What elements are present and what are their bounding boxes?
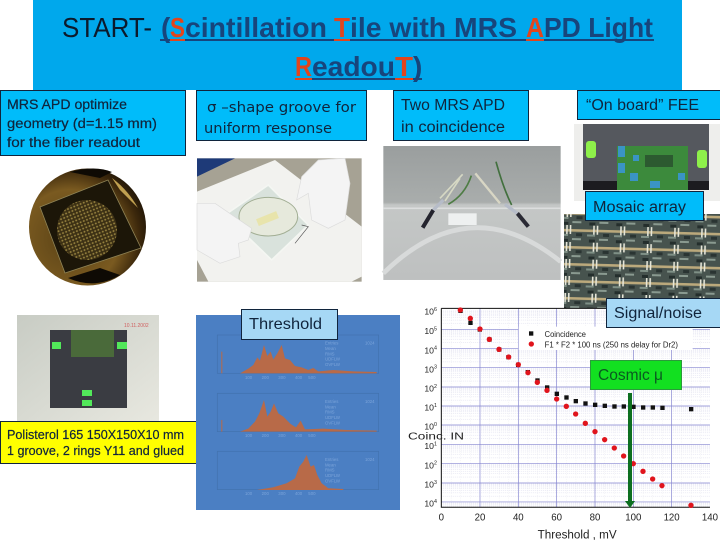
chart: threshold histograms: 500 <box>308 433 316 438</box>
photo: tile with electronics <box>17 315 159 423</box>
chart: threshold histograms: 500 <box>308 491 316 496</box>
title banner: PD Light <box>544 12 653 43</box>
caption: signal/noise <box>606 298 720 328</box>
photo: gloved hands holding tile <box>197 158 362 282</box>
chart: threshold histograms: Entries <box>325 341 338 346</box>
chart: threshold histograms: 300 <box>278 491 286 496</box>
chart: coincidence rate versus threshold: 140 <box>702 513 718 524</box>
series: accidental rate <box>458 307 694 508</box>
chart: threshold histograms: Mean <box>325 346 336 351</box>
caption: mosaic array: Mosaic array <box>593 199 686 216</box>
chart: coincidence rate versus threshold: 60 <box>551 513 562 524</box>
chart: threshold histograms: Mean <box>325 404 336 409</box>
title banner: S <box>170 12 185 43</box>
caption: polisterol tile: Polisterol 165 150X150X10 mm <box>7 427 184 442</box>
chart: threshold histograms: 100 <box>245 375 253 380</box>
chart: coincidence rate versus threshold: 2 <box>434 384 437 390</box>
chart: threshold histograms: RMS <box>325 351 335 356</box>
caption: MRS APD geometry: MRS APD optimize <box>7 97 127 112</box>
caption: polisterol tile <box>0 422 196 464</box>
chart: coincidence rate versus threshold: 3 <box>434 480 437 486</box>
title banner: A <box>526 12 544 43</box>
photo: mosaic array <box>564 214 720 323</box>
chart: coincidence rate versus threshold: 10 <box>424 499 434 509</box>
chart: coincidence rate versus threshold: 10 <box>424 307 434 317</box>
chart: threshold histograms: OVFLW <box>325 478 341 483</box>
chart: coincidence rate versus threshold: 10 <box>424 460 434 470</box>
chart: threshold histograms: 1024 <box>365 399 375 404</box>
caption: groove shape: σ –shape groove for <box>207 100 356 116</box>
title banner: ( <box>161 12 171 43</box>
chart: threshold histograms: UDFLW <box>325 357 341 362</box>
chart: threshold histograms: UDFLW <box>325 415 341 420</box>
chart: coincidence rate versus threshold: 5 <box>434 326 437 332</box>
chart: coincidence rate versus threshold: 80 <box>590 513 600 524</box>
chart: threshold histograms: UDFLW <box>325 473 341 478</box>
chart: coincidence rate versus threshold: 2 <box>434 461 437 467</box>
chart: threshold histograms: 300 <box>278 375 286 380</box>
chart: threshold histograms: 200 <box>262 491 269 496</box>
series: coincidence <box>458 309 693 411</box>
title banner: ile with MRS <box>350 12 517 43</box>
chart: coincidence rate versus threshold: 10 <box>424 441 434 451</box>
chart: coincidence rate versus threshold: 1 <box>434 441 437 447</box>
chart: coincidence rate versus threshold: 40 <box>513 513 524 524</box>
chart: threshold histograms: OVFLW <box>325 420 341 425</box>
chart: threshold histograms: 200 <box>262 433 269 438</box>
chart: threshold histograms: Mean <box>325 462 336 467</box>
title banner: R <box>295 51 312 82</box>
photo: tile with electronics: 10.11.2002 <box>124 323 149 329</box>
chart: coincidence rate versus threshold: 0 <box>439 513 444 524</box>
title banner: START- <box>62 12 152 43</box>
caption: mosaic array <box>586 192 704 220</box>
title banner: eadou <box>312 51 395 82</box>
chart: coincidence rate versus threshold: 100 <box>625 513 641 524</box>
caption: MRS APD geometry: for the fiber readout <box>7 135 140 150</box>
photo: MRS APD circular close-up <box>29 168 146 286</box>
chart: coincidence rate versus threshold: 4 <box>434 499 437 505</box>
caption: on board FEE: “On board” FEE <box>586 97 699 114</box>
caption: polisterol tile: 1 groove, 2 rings Y11 and glued <box>7 443 184 458</box>
arrow: cosmic muon threshold <box>625 393 635 508</box>
title banner: T <box>334 12 350 43</box>
chart: coincidence rate versus threshold: 10 <box>424 403 434 413</box>
caption: threshold: Threshold <box>249 316 322 333</box>
caption: on board FEE <box>578 90 720 120</box>
caption: groove shape: uniform response <box>204 121 332 137</box>
chart: threshold histograms: RMS <box>325 468 335 473</box>
chart: coincidence rate versus threshold: 10 <box>424 384 434 394</box>
chart: coincidence rate versus threshold: 20 <box>475 513 485 524</box>
chart: threshold histograms: Entries <box>325 457 338 462</box>
chart: coincidence rate versus threshold: 10 <box>424 326 434 336</box>
caption: two MRS APD: in coincidence <box>401 119 505 136</box>
caption: signal/noise: Signal/noise <box>614 305 702 322</box>
chart: threshold histograms: 200 <box>262 375 269 380</box>
caption: cosmic muon <box>590 360 682 390</box>
caption: MRS APD geometry <box>0 90 186 156</box>
caption: two MRS APD <box>394 90 528 140</box>
title banner: ) <box>413 51 422 82</box>
chart: threshold histograms: 400 <box>295 433 303 438</box>
chart: threshold histograms: OVFLW <box>325 362 341 367</box>
caption: two MRS APD: Two MRS APD <box>401 97 505 114</box>
title banner: T <box>395 51 413 82</box>
photo: two MRS APD on tile <box>383 146 561 280</box>
chart: coincidence rate versus threshold: 120 <box>664 513 680 524</box>
chart: coincidence rate versus threshold: 3 <box>434 365 437 371</box>
legend: F1 * F2 * 100 ns (250 ns delay for Dr2) <box>545 340 678 350</box>
legend <box>519 327 693 350</box>
caption: cosmic muon: Cosmic μ <box>598 367 663 384</box>
chart: threshold histograms: 400 <box>295 491 303 496</box>
chart: coincidence rate versus threshold: 10 <box>424 422 434 432</box>
chart: threshold histograms: Entries <box>325 399 338 404</box>
chart: threshold histograms: 100 <box>245 433 253 438</box>
chart: threshold histograms <box>196 315 400 510</box>
chart: threshold histograms: 300 <box>278 433 286 438</box>
chart: coincidence rate versus threshold: 1 <box>434 403 437 409</box>
chart: coincidence rate versus threshold: 4 <box>434 346 437 352</box>
chart: threshold histograms: 1024 <box>365 341 375 346</box>
axis label: y: Coinc. IN <box>408 432 464 443</box>
chart: coincidence rate versus threshold <box>408 307 718 540</box>
caption: groove shape <box>196 90 366 140</box>
chart: threshold histograms: 400 <box>295 375 303 380</box>
chart: threshold histograms: 1024 <box>365 457 375 462</box>
caption: threshold <box>242 310 338 340</box>
caption: MRS APD geometry: geometry (d=1.15 mm) <box>7 116 157 131</box>
legend: Coincidence <box>545 329 586 339</box>
chart: threshold histograms: RMS <box>325 410 335 415</box>
title banner <box>33 0 682 90</box>
chart: threshold histograms: 100 <box>245 491 253 496</box>
chart: coincidence rate versus threshold: 10 <box>424 480 434 490</box>
chart: threshold histograms: 500 <box>308 375 316 380</box>
chart: coincidence rate versus threshold: 10 <box>424 364 434 374</box>
chart: coincidence rate versus threshold: 6 <box>434 307 437 313</box>
chart: coincidence rate versus threshold: 10 <box>424 345 434 355</box>
photo: on board FEE <box>574 124 720 201</box>
title banner: cintillation <box>185 12 327 43</box>
chart: coincidence rate versus threshold: 0 <box>434 422 437 428</box>
